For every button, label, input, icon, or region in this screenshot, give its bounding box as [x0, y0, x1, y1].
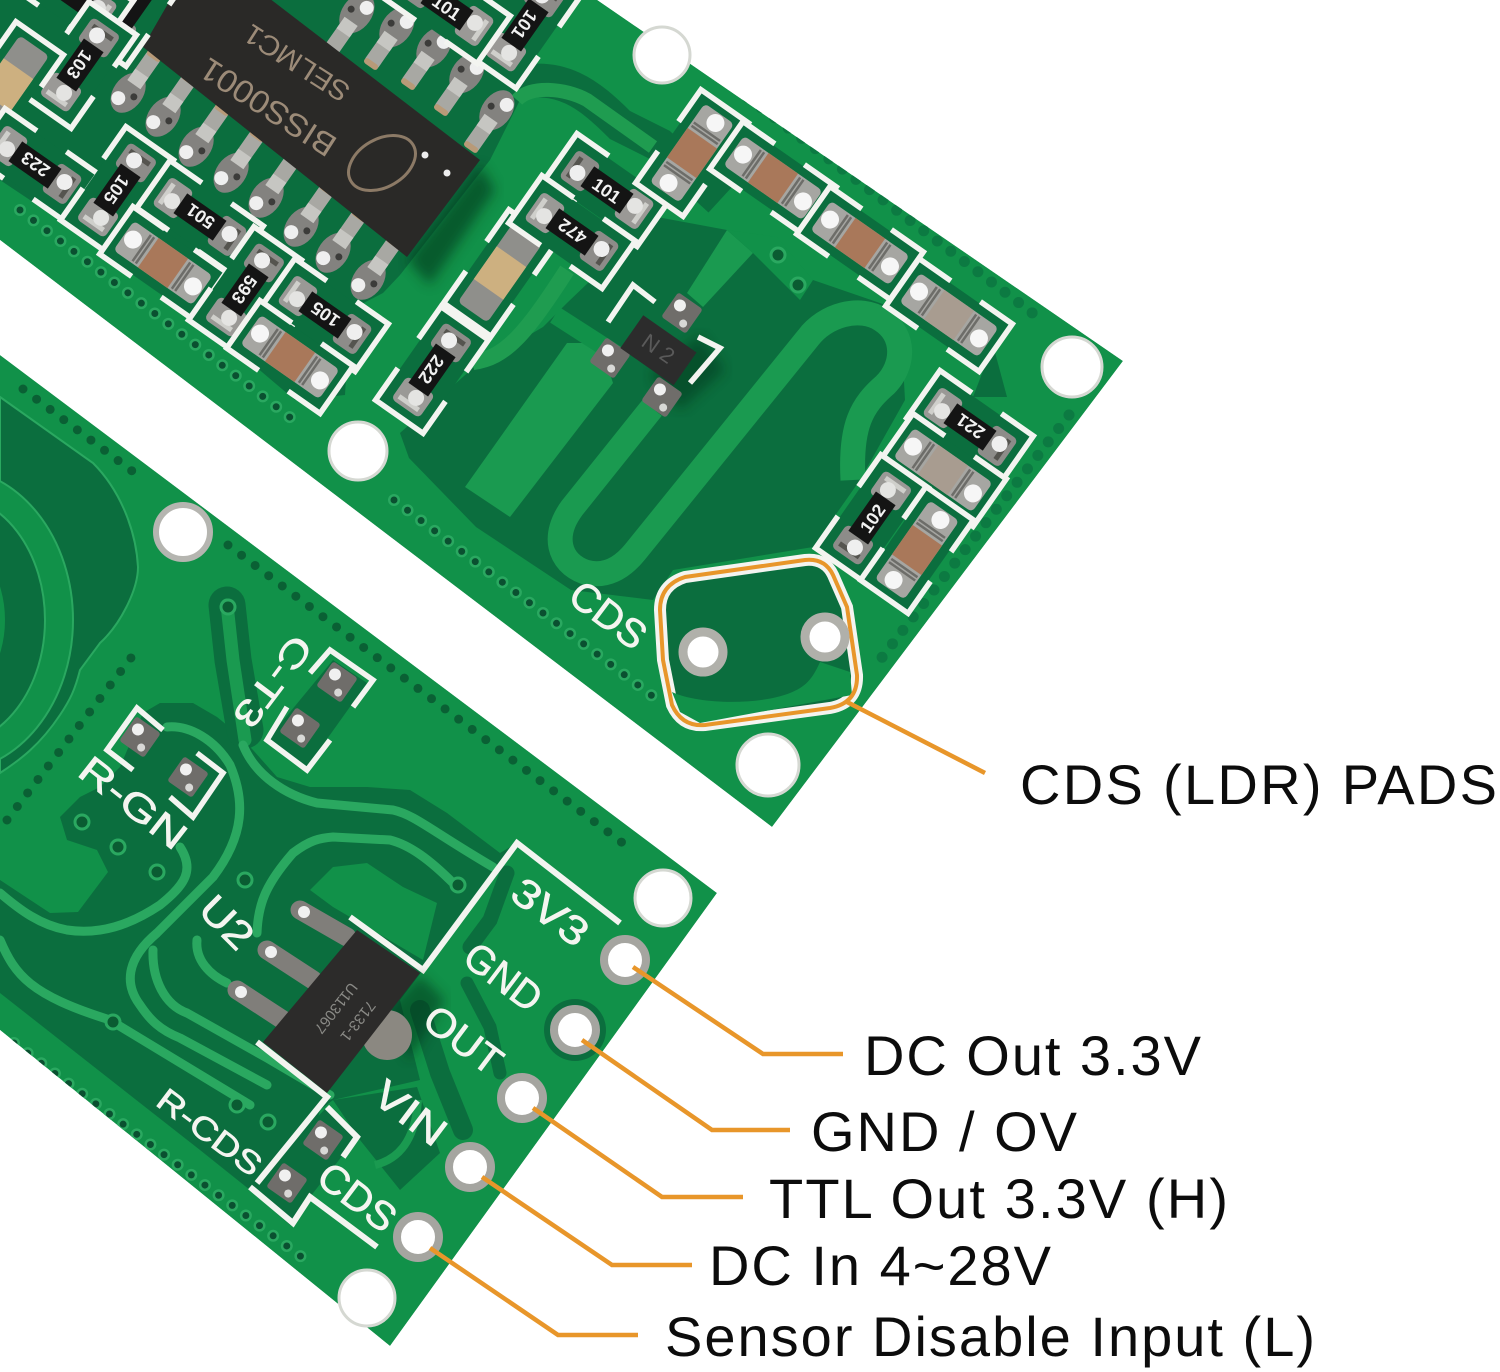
capacitor left: [0, 18, 68, 116]
light trace band by top hole: [517, 90, 653, 147]
via dots lower edge: [20, 87, 1069, 698]
pin hole 3V3: [604, 939, 646, 981]
part top-left B: [26, 0, 138, 28]
pin hole OUT: [501, 1077, 543, 1119]
arc ring centre: [0, 540, 5, 700]
lower light arc near VIN: [375, 1100, 418, 1165]
label: DC Out 3.3V: [864, 1024, 1202, 1087]
CDS pad area: [660, 560, 857, 725]
arc ring outer: [0, 468, 73, 772]
transistor pad left: [589, 337, 631, 379]
resistor 105 lower: 105: [308, 297, 344, 331]
transistor mark: N 2: [637, 329, 680, 369]
resistor top: [384, 0, 510, 63]
right dark traces: [420, 873, 507, 1130]
leader line: [430, 1248, 638, 1335]
resistor 105: 105: [99, 171, 133, 207]
leader line: [633, 967, 843, 1054]
resistor 101 top: [469, 0, 581, 88]
capacitor brown lower: [227, 301, 353, 413]
R-CDS pad 2: [266, 1162, 308, 1204]
via dots: [7, 389, 624, 1261]
regulator shadow: [385, 975, 445, 1060]
BISS0001 IC: [143, 0, 480, 257]
R-CDS pad backing: [250, 1107, 357, 1223]
silk label C-T3: C-T3: [225, 627, 321, 736]
leader line: [482, 1177, 692, 1265]
silk label CDS: CDS: [309, 1154, 405, 1241]
silk label GND: GND: [455, 934, 550, 1021]
resistor 472: 472: [555, 214, 591, 248]
leader line: [533, 1108, 743, 1197]
IC legs upper row: [326, 0, 514, 153]
resistor 103: 103: [62, 46, 96, 82]
resistor 221: [907, 371, 1033, 483]
silk label VIN: VIN: [365, 1072, 455, 1155]
regulator marking 2: U113067: [310, 979, 361, 1037]
light band to transistor: [555, 315, 625, 360]
arc ring inner dark: [0, 495, 45, 745]
resistor 101 top: 101: [507, 6, 541, 42]
silk label R-GN: R-GN: [70, 749, 195, 859]
capacitor grey: [886, 259, 1012, 371]
IC dot 2: [444, 170, 450, 176]
capacitor top right 3: [797, 187, 923, 299]
IC legs lower row: [103, 45, 408, 306]
N2 transistor: [589, 285, 725, 418]
capacitor tan: [444, 210, 556, 336]
transistor body: [620, 315, 697, 385]
dark pour near VIN: [333, 1087, 440, 1190]
lower board mounting hole 1: [156, 505, 210, 559]
resistor 472: [509, 176, 635, 288]
callout: TTL out: [533, 1108, 1228, 1230]
CDS through hole right: [805, 617, 845, 657]
regulator marking: 7133-1: [336, 997, 379, 1044]
IC batch marking: SELMC1: [238, 18, 355, 108]
label: CDS (LDR) PADS: [1020, 753, 1497, 816]
capacitor brown right: [861, 487, 973, 613]
lower PCB board: [0, 355, 717, 1346]
callout: CDS (LDR) pads: [847, 702, 1497, 816]
regulator tab solder: [362, 1010, 412, 1060]
pin hole GND: [554, 1009, 596, 1051]
dark patch near 221: [973, 353, 1007, 397]
CDS pad highlight: [660, 560, 857, 725]
silk label R-CDS: R-CDS: [150, 1081, 269, 1183]
part top-left A: [119, 0, 176, 70]
resistor 102: 102: [856, 501, 890, 537]
large dark arc pour: [0, 397, 138, 773]
light trace lines: [0, 727, 493, 1105]
callout: DC out 3.3V: [633, 967, 1202, 1087]
dark trace band by top hole: [510, 81, 720, 200]
T3 pad 1: [316, 661, 358, 703]
capacitor grey lower: [880, 414, 1006, 526]
dark ring around GND pin: [544, 999, 606, 1061]
IC body: [143, 0, 480, 257]
CDS through hole left: [683, 632, 723, 672]
dark trace from top via: [227, 605, 245, 730]
silk label U2: U2: [190, 887, 262, 959]
regulator U2: [263, 930, 420, 1093]
U2 inner base patch: [310, 863, 437, 960]
IC logo: [347, 134, 417, 192]
resistor 593: [189, 227, 301, 353]
light via trace: [227, 605, 245, 740]
strip to transistor top pad: [687, 230, 753, 307]
light arc from capacitor: [473, 270, 567, 362]
resistor 221: 221: [953, 409, 989, 443]
IC dot: [422, 152, 428, 158]
board substrate: [0, 0, 1123, 827]
top board mounting hole 1: [634, 27, 690, 83]
transistor pad bottom: [641, 376, 683, 418]
silk label OUT: OUT: [415, 997, 511, 1084]
regulator legs: [235, 906, 347, 1020]
IC shadow: [407, 165, 495, 285]
finger via 1: [771, 248, 785, 262]
lower board mounting hole 2: [635, 870, 691, 926]
top board mounting hole 2: [1042, 337, 1102, 397]
leader line: [582, 1040, 790, 1130]
finger trace with vias: [727, 230, 813, 300]
label: DC In 4~28V: [709, 1234, 1052, 1297]
lower board mounting hole 3: [339, 1270, 395, 1326]
regulator body: [263, 930, 420, 1093]
pin hole VIN: [449, 1146, 491, 1188]
label: GND / OV: [811, 1100, 1078, 1163]
callout: sensor disable: [430, 1248, 1315, 1368]
leader line: [847, 702, 985, 773]
capacitor brown: [100, 207, 226, 319]
CDS pad crescent: [672, 662, 852, 723]
silk label 3V3: 3V3: [503, 869, 597, 956]
top PCB board: [0, 0, 1123, 827]
R-GN frames: [107, 708, 223, 817]
light patch antenna rectangle: [465, 343, 613, 517]
T3 pad backing: [267, 660, 367, 767]
vias around traces: [75, 600, 465, 1129]
dark antenna pour: [400, 217, 905, 600]
capacitor top right 2: [710, 122, 836, 234]
resistor 223: 223: [18, 147, 54, 181]
R-CDS pad 1: [302, 1119, 344, 1161]
silk label CDS top board: CDS: [561, 572, 655, 659]
silk outline lower left: [250, 1042, 377, 1247]
R-GN pad 1: [119, 716, 161, 758]
T3 frames: [267, 650, 373, 770]
transistor frame bottom: [690, 337, 720, 383]
resistor 102: [816, 455, 928, 581]
callout: GND: [582, 1040, 1078, 1163]
resistor 593: 593: [227, 271, 261, 307]
resistor 501: [137, 161, 263, 273]
meander antenna trace: [560, 313, 900, 574]
top board mounting hole 4: [737, 734, 799, 796]
pin hole CDS: [397, 1216, 439, 1258]
dark copper around chips: [0, 0, 525, 400]
resistor 101: 101: [588, 174, 624, 208]
T3 pad 2: [279, 707, 321, 749]
resistor 101: [544, 134, 670, 246]
board substrate: [0, 355, 717, 1346]
R-GN pad 2: [167, 756, 209, 798]
SMD parts: [0, 0, 1033, 613]
label: Sensor Disable Input (L): [665, 1305, 1315, 1368]
finger via 2: [791, 278, 805, 292]
transistor pad top: [661, 292, 703, 334]
resistor 222: [376, 307, 488, 433]
IC marking: BISS0001: [194, 51, 343, 164]
callout: DC in: [482, 1177, 1052, 1297]
silk outline regulator and pins: [350, 843, 620, 970]
transistor frame top: [608, 285, 655, 322]
transistor shadow: [650, 335, 725, 410]
resistor 222: 222: [414, 351, 448, 387]
resistor 105 lower: [262, 259, 388, 371]
resistor 103: [24, 2, 136, 128]
dark central pour: [0, 703, 517, 1225]
resistor 501: 501: [183, 199, 219, 233]
label: TTL Out 3.3V (H): [769, 1167, 1228, 1230]
resistor 105: [61, 127, 173, 253]
capacitor top right 1: [636, 90, 748, 216]
resistor 223: [0, 109, 98, 221]
top board mounting hole 3: [329, 422, 387, 480]
